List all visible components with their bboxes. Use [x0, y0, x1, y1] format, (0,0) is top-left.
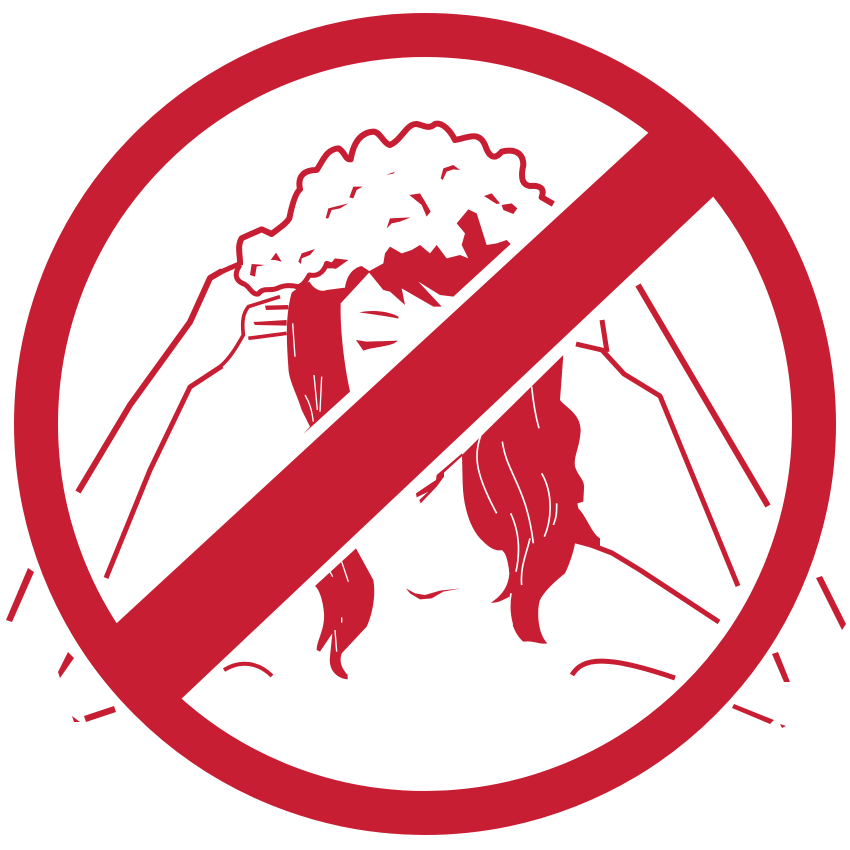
right outer arm [638, 285, 768, 506]
right shoulder [570, 537, 719, 622]
fingers [220, 297, 287, 367]
right lock of hair [462, 355, 600, 644]
lock white streaks [293, 323, 322, 422]
left lock of hair [287, 266, 370, 434]
small hand [416, 453, 463, 503]
lower left lock [315, 548, 374, 679]
lower lock streaks [330, 562, 348, 652]
lower hair mass [368, 209, 511, 307]
mouth [406, 588, 461, 599]
left collar curve [224, 664, 272, 676]
icon: afro hair and left hands [220, 124, 553, 434]
left outer arm [78, 271, 222, 492]
face marks [356, 311, 398, 351]
right collar curve [572, 661, 675, 678]
prohibition slash [93, 111, 734, 719]
icon: arms and shoulders [78, 271, 768, 678]
hair streaks [477, 387, 557, 625]
curl details [250, 165, 517, 277]
right inner arm [576, 320, 738, 586]
outer shoulder fragments [6, 568, 846, 728]
icon: flowing hair and neck [315, 355, 600, 679]
finger strokes [253, 305, 288, 326]
afro lower outline [220, 263, 337, 294]
left inner arm [106, 366, 222, 578]
afro hair outline [239, 124, 553, 265]
